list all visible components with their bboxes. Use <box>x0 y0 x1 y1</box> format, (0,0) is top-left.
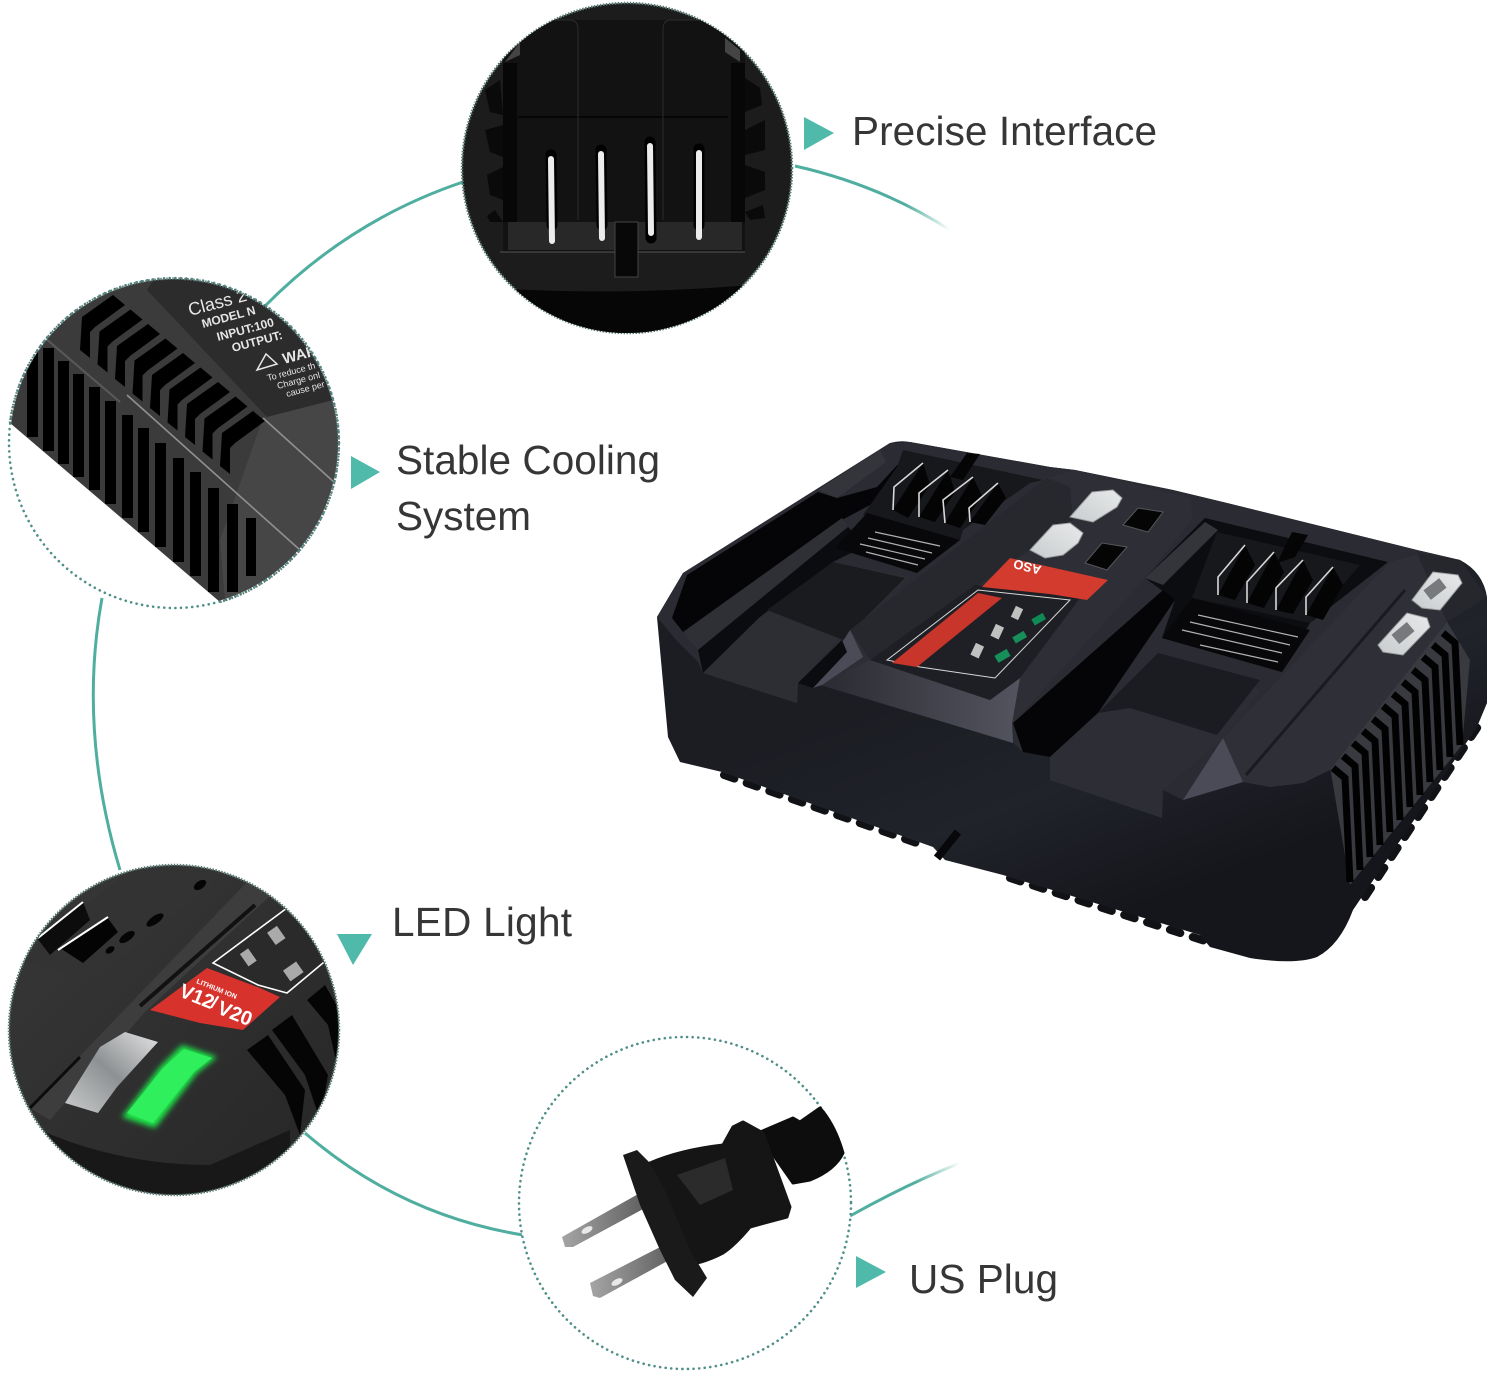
text: Stable Cooling <box>396 437 660 483</box>
right ridge groove <box>1246 590 1405 775</box>
plug flange <box>623 1150 707 1297</box>
corner highlights <box>725 38 740 62</box>
rating label text: OUTPUT: <box>230 328 284 355</box>
green indicator glow <box>122 1045 217 1128</box>
battery slot left <box>37 902 90 955</box>
red strip <box>892 593 1002 667</box>
left bay pin shadows <box>893 463 1006 528</box>
left second status button <box>1030 523 1083 558</box>
lower shadow <box>46 1130 290 1194</box>
right floor <box>1050 653 1260 818</box>
right status button <box>1412 572 1462 610</box>
status indicators <box>970 606 1046 663</box>
red brand text: ASO <box>1012 556 1043 578</box>
USB port lower <box>1085 543 1127 570</box>
right vents <box>745 78 765 220</box>
left outer channel <box>672 460 905 635</box>
icon panel content <box>240 926 304 981</box>
right back wall <box>1192 532 1360 623</box>
rating label text: MODEL N <box>200 303 257 331</box>
text: System <box>396 493 531 539</box>
notch <box>615 222 638 277</box>
left vents <box>485 80 503 222</box>
ridge lines <box>45 338 120 402</box>
side fins <box>27 335 256 592</box>
floor edge <box>500 252 745 253</box>
left bay post <box>950 453 980 480</box>
plug blade top <box>562 1193 645 1247</box>
lower crescent <box>515 286 743 333</box>
left floor <box>703 562 910 703</box>
text: Precise Interface <box>852 108 1157 154</box>
dotted rim <box>9 278 339 608</box>
top deck <box>657 442 1487 818</box>
red voltage label <box>150 968 280 1030</box>
right bay recess <box>1145 518 1388 672</box>
right bay <box>1013 518 1388 818</box>
detail circle: precise interface <box>450 3 800 340</box>
side vent fins <box>1333 633 1460 882</box>
lower right face <box>220 400 338 599</box>
charger housing <box>0 270 345 602</box>
detail circle: LED light <box>9 860 345 1200</box>
contact pins <box>551 146 699 241</box>
right bay warning label <box>1162 598 1310 672</box>
label: precise interface <box>804 108 1157 154</box>
centre ridge <box>30 882 270 1120</box>
right bay post <box>1277 532 1308 563</box>
right plate <box>1098 653 1260 735</box>
recess seams <box>518 116 728 118</box>
pointer <box>351 456 380 489</box>
right bay groove <box>1013 590 1175 757</box>
label: LED light <box>337 899 572 965</box>
USB port upper <box>1123 508 1163 532</box>
voltage text <box>182 978 252 1025</box>
battery slot right <box>60 917 118 963</box>
text: LED Light <box>392 899 572 945</box>
main product: dual battery charger <box>657 441 1487 961</box>
plug body <box>650 1122 790 1265</box>
clear indicator <box>65 1032 158 1113</box>
centre peak <box>813 630 863 688</box>
right ridge <box>1223 555 1447 787</box>
right bay pin shadows <box>1218 545 1343 620</box>
right outer shoulder <box>1417 552 1487 622</box>
detail circle: stable cooling system <box>0 270 345 610</box>
pointer <box>856 1256 886 1288</box>
rating label text: Class 2 <box>186 285 249 320</box>
rating label text: Charge onl <box>276 370 321 391</box>
rating label text: cause per <box>285 379 326 399</box>
serrated rim <box>462 3 792 333</box>
blade holes <box>580 1225 624 1287</box>
pointer <box>804 117 834 150</box>
voltage text: / <box>209 992 221 1013</box>
left back wall <box>863 450 1043 540</box>
connector arcs <box>93 166 960 1235</box>
charger body silhouette <box>657 441 1487 961</box>
left status button <box>1070 490 1122 522</box>
centre deck <box>820 470 1193 743</box>
left bay warning label <box>835 513 960 573</box>
serrated rim over image <box>10 279 339 602</box>
centre front gloss <box>822 660 1020 743</box>
left lip <box>683 518 848 650</box>
rating label text: To reduce th <box>266 360 316 383</box>
red brand label <box>982 558 1108 600</box>
contact holes <box>104 878 208 955</box>
detail circle: US plug <box>519 1037 851 1369</box>
label: stable cooling system <box>351 437 660 539</box>
left plate <box>767 562 905 640</box>
green indicator <box>127 1049 212 1123</box>
control panel recess <box>870 585 1080 700</box>
upper bay <box>25 866 222 962</box>
left inner wall <box>698 527 867 673</box>
voltage text: V12 <box>176 980 217 1014</box>
charger wall <box>503 20 745 252</box>
icon panel <box>213 908 333 993</box>
right peak <box>1183 738 1243 800</box>
rating label panel <box>147 279 332 417</box>
right bay tab <box>1145 522 1218 585</box>
left bay tab <box>818 450 886 498</box>
voltage text: LITHIUM ION <box>195 978 238 1001</box>
centre ridge highlight <box>850 478 1073 660</box>
label: US plug <box>856 1256 1058 1302</box>
plug blade bottom <box>590 1243 673 1298</box>
contact floor <box>508 222 742 250</box>
rating label text: WAR <box>281 342 319 368</box>
top louvres <box>80 295 265 474</box>
rating label text <box>188 292 324 396</box>
plug neck <box>758 1108 843 1183</box>
pointer <box>337 934 372 965</box>
side channels <box>503 63 517 222</box>
left bay contact pins <box>893 463 998 523</box>
voltage text: V20 <box>214 997 255 1031</box>
left bay <box>672 450 1043 703</box>
centre tab <box>798 640 847 688</box>
serrated rim <box>9 865 339 1195</box>
dotted rim <box>519 1037 851 1369</box>
side vent face <box>1330 622 1470 885</box>
warning triangle <box>257 354 277 370</box>
grip ridges <box>677 1158 733 1205</box>
text: US Plug <box>909 1256 1058 1302</box>
right second status button <box>1378 613 1430 655</box>
pin halos <box>551 142 699 238</box>
rating label text: INPUT:100 <box>215 315 276 344</box>
control panel outline <box>887 590 1070 678</box>
bottom feet <box>724 722 1481 941</box>
side fins <box>247 985 345 1135</box>
right bay contact pins <box>1218 545 1333 615</box>
power cord stub <box>937 832 958 858</box>
